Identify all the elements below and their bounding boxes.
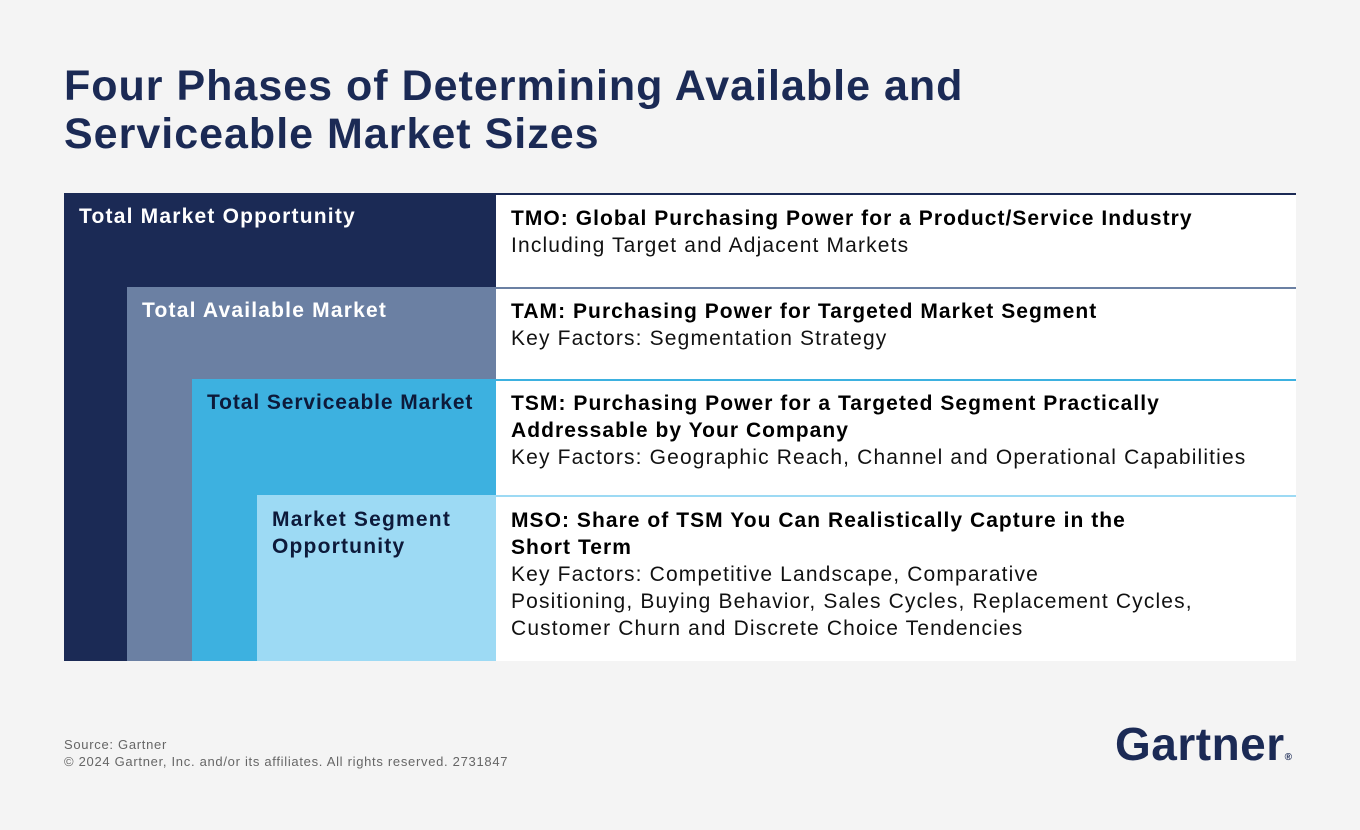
nested boxes diagram bbox=[64, 193, 496, 661]
row: MSO: Positioning, Buying Behavior, Sales Cycles, Replacement Cycles, bbox=[511, 590, 1193, 613]
row: TAM: TAM: Purchasing Power for Targeted Market Segment bbox=[511, 300, 1097, 323]
logo: Gartner: Gartner® bbox=[1115, 718, 1292, 770]
row: MSO: Short Term bbox=[511, 536, 632, 559]
label: MSO: Opportunity bbox=[272, 535, 405, 558]
box: TAM bbox=[127, 287, 496, 661]
title: Four Phases of Determining Available and bbox=[64, 62, 963, 110]
label: MSO: Market Segment bbox=[272, 508, 451, 531]
row: MSO: Customer Churn and Discrete Choice Tendencies bbox=[511, 617, 1023, 640]
row: MSO: MSO: Share of TSM You Can Realistically Capture in the bbox=[511, 509, 1126, 532]
label: MSO bbox=[272, 508, 451, 558]
row: TSM: Key Factors: Geographic Reach, Channel and Operational Capabilities bbox=[511, 446, 1246, 469]
label: TMO: Total Market Opportunity bbox=[79, 205, 356, 228]
row: TAM: Key Factors: Segmentation Strategy bbox=[511, 327, 887, 350]
title: Serviceable Market Sizes bbox=[64, 110, 600, 158]
footer source: Source: Gartner bbox=[64, 737, 167, 752]
row: TSM: Addressable by Your Company bbox=[511, 419, 849, 442]
row: TMO bbox=[496, 193, 1296, 287]
footer source bbox=[64, 737, 508, 769]
label: TAM: Total Available Market bbox=[142, 299, 387, 322]
row: TMO: Including Target and Adjacent Markets bbox=[511, 234, 909, 257]
row: TAM bbox=[496, 287, 1296, 379]
footer source: © 2024 Gartner, Inc. and/or its affiliates. All rights reserved. 2731847 bbox=[64, 754, 508, 769]
row: MSO: Key Factors: Competitive Landscape, Comparative bbox=[511, 563, 1039, 586]
row: TMO: TMO: Global Purchasing Power for a Product/Service Industry bbox=[511, 207, 1193, 230]
box: TSM bbox=[192, 379, 496, 661]
row: TSM bbox=[496, 379, 1296, 495]
row: TSM: TSM: Purchasing Power for a Targeted Segment Practically bbox=[511, 392, 1160, 415]
box: MSO bbox=[257, 495, 496, 661]
label: TSM: Total Serviceable Market bbox=[207, 391, 473, 414]
title bbox=[64, 62, 963, 158]
row: MSO bbox=[496, 495, 1296, 661]
